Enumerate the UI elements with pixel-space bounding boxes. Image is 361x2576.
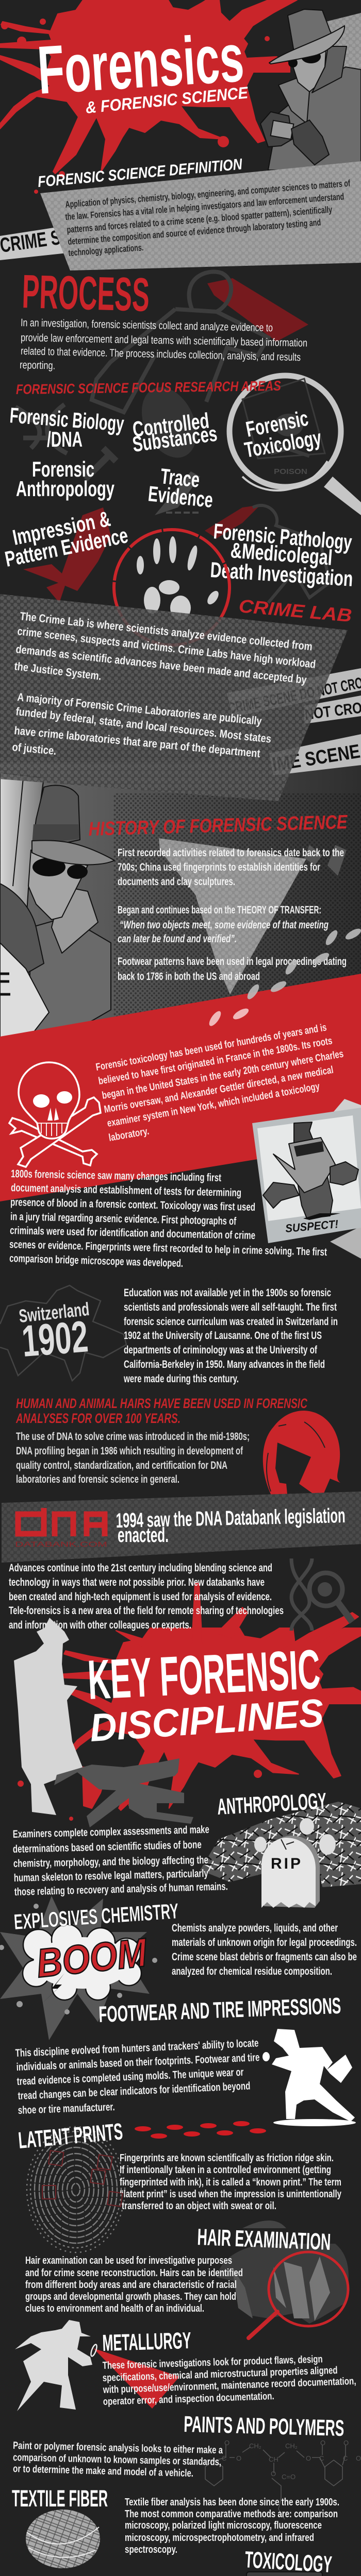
text: hair examination: groups and developmental growth phases. They can hold — [25, 2291, 236, 2302]
background: process ghost images — [15, 272, 330, 603]
panel: history background — [0, 762, 361, 1041]
text: explosives — [172, 1922, 357, 1977]
text: hair examination — [25, 2255, 243, 2314]
text: hair examination: Hair examination can be used for investigative purposes — [25, 2255, 232, 2266]
text: 1800s forensic science: document analysis and establishment of tests for determining — [11, 1182, 241, 1199]
text: paints: comparison of unknown to known samples or standards, — [13, 2452, 221, 2468]
icon: skull and crossbones — [9, 1062, 101, 1167]
icon: handprint in red ring — [114, 530, 229, 645]
text: history of forensic science — [118, 847, 347, 982]
panel: crime lab: A majority of Forensic Crime Laboratories are publically — [17, 690, 262, 727]
icon: hair under magnifier — [217, 2221, 349, 2338]
text: 1800s forensic science: presence of blood in a forensic context. Toxicology was first used — [10, 1196, 255, 1213]
icon: polymer chemical diagram: C — [319, 2454, 324, 2462]
section: hair examination — [25, 2221, 349, 2338]
illustration: detective behind newspaper — [0, 773, 114, 1041]
text: history of forensic science: can later be found and verified”. — [118, 933, 237, 945]
icon: polymer chemical diagram: O — [224, 2439, 229, 2447]
panel: crime lab: funded by federal, state, and local resources. Most states — [15, 705, 272, 745]
icon: polymer chemical diagram: C — [222, 2454, 226, 2462]
label: switzerland 1902: Switzerland — [18, 1298, 90, 1327]
text: anthropology: human skeleton to resolve legal matters, particularly — [14, 1868, 208, 1884]
text: 1800s forensic science — [9, 1168, 327, 1269]
title: key forensic disciplines: DISCIPLINES — [88, 1691, 325, 1750]
text: process description: In an investigation, forensic scientists collect and analyze evidence to — [21, 317, 273, 334]
section: explosives chemistry — [0, 1896, 357, 2040]
text: hair examination: from different body areas and are characteristic of racial — [25, 2279, 237, 2291]
text: paints — [13, 2440, 223, 2479]
icon: footprints — [207, 926, 361, 1028]
text: anthropology: Examiners complete complex assessments and make — [13, 1824, 209, 1840]
icon: polymer chemical diagram: CH₂ — [285, 2442, 298, 2450]
map: switzerland outline — [0, 1285, 126, 1381]
text: education — [123, 1287, 338, 1385]
icon: polymer chemical diagram: O — [236, 2454, 241, 2462]
icon: dna magnifier ghost — [291, 1558, 352, 1631]
panel: dna databank — [2, 1492, 361, 1563]
section: textile fiber — [12, 2485, 339, 2568]
heading: process: PROCESS — [21, 265, 150, 321]
title: Forensics — [36, 20, 246, 108]
text: footwear: tread changes can be clear indicators for identification beyond — [18, 2080, 251, 2102]
section: latent prints — [17, 2118, 342, 2252]
text: toxicology history — [95, 1022, 344, 1144]
silhouette: chalk figure — [54, 1758, 193, 1827]
icon: fingerprint — [27, 2127, 125, 2252]
icon: detective with beam — [15, 2320, 179, 2411]
panel: toxicology red band — [0, 926, 361, 1201]
icon: boom burst — [0, 1896, 157, 2040]
text: hair examination: clues to environment and health of an individual. — [25, 2303, 204, 2314]
icon: bone pile and tombstone — [200, 1802, 361, 1908]
text: paints: or to determine the make and model of a vehicle. — [13, 2463, 193, 2479]
text: footwear: This discipline evolved from hunters and trackers' ability to locate — [15, 2037, 259, 2059]
text: education: were made during this century. — [123, 1373, 239, 1385]
logo: dna databank: DATABANK.COM — [15, 1540, 107, 1548]
heading: latent prints: LATENT PRINTS — [17, 2118, 124, 2154]
text: 1994: enacted. — [118, 1524, 169, 1547]
silhouette: detective standing — [14, 1618, 83, 1815]
icon: polymer chemical diagram: O — [306, 2454, 311, 2462]
logo: dna databank — [15, 1508, 107, 1548]
panel: crime lab — [0, 594, 348, 801]
text: dna: quality control, standardization, and certification for DNA — [16, 1460, 227, 1471]
text: textile fiber — [125, 2497, 339, 2555]
text: 21st century: technology in ways that were not possible prior. New databanks have — [9, 1577, 265, 1588]
title: key forensic disciplines — [86, 1638, 325, 1750]
icon: polymer chemical diagram: O — [271, 2470, 276, 2478]
icon: polymer chemical diagram: CH — [269, 2455, 278, 2463]
text: anthropology: chemistry, morphology, and the biology affecting the — [13, 1854, 208, 1870]
text: 1994 — [116, 1504, 346, 1547]
panel: definition: technology applications. — [68, 242, 144, 258]
icon: polymer chemical diagram: O — [320, 2439, 325, 2447]
panel: crime lab: the Justice System. — [13, 659, 102, 683]
text: history of forensic science: back to 1786 in both the US and abroad — [118, 971, 260, 982]
detective with camera — [260, 9, 361, 170]
list: research areas — [3, 403, 354, 591]
text: 21st century — [9, 1562, 284, 1631]
icon: yarn ball — [26, 2510, 100, 2568]
section: metallurgy — [15, 2320, 356, 2411]
blood splatter — [0, 0, 297, 193]
icon: polymer chemical diagram: CH₂ — [249, 2442, 261, 2450]
list: research areas: Impression & — [10, 506, 112, 550]
text: footwear: tread evidence is completed using molds. The unique wear or — [17, 2066, 244, 2088]
heading: explosives chemistry: EXPLOSIVES CHEMISTRY — [13, 1899, 179, 1934]
list: research areas: /DNA — [47, 427, 83, 451]
text: dna: The use of DNA to solve crime was introduced in the mid-1980s; — [16, 1431, 250, 1443]
icon: red footprints — [135, 2121, 266, 2139]
heading: hairs: ANALYSES FOR OVER 100 YEARS. — [15, 1411, 180, 1426]
heading: crime lab: CRIME LAB — [238, 595, 353, 626]
text: footwear — [15, 2037, 260, 2116]
panel: crime lab: demands as scientific advances have been made and accepted by — [15, 642, 308, 686]
subtitle: & FORENSIC SCIENCE — [85, 83, 250, 117]
text: 1800s forensic science: in a jury trial regarding arsenic evidence. First photographs of — [10, 1211, 237, 1227]
text: paints: Paint or polymer forensic analysis looks to either make a — [13, 2440, 223, 2456]
text: hair examination: and for crime scene reconstruction. Hairs can be identified — [25, 2267, 243, 2279]
text: process description — [20, 317, 307, 372]
heading: hairs — [15, 1396, 307, 1426]
icon: bone pile and tombstone: RIP — [271, 1855, 301, 1872]
section: footwear and tire — [15, 1993, 356, 2139]
heading: definition: FORENSIC SCIENCE DEFINITION — [37, 156, 243, 191]
icon: polymer chemical diagram: O — [356, 2454, 361, 2462]
text: process description: reporting. — [20, 359, 55, 372]
section: anthropology — [13, 1788, 361, 1908]
text: footwear: shoe or tire manufacturer. — [18, 2101, 115, 2116]
text: dna: laboratories and forensic science in general. — [16, 1473, 179, 1485]
text: latent prints: transferred to an object with sweat or oil. — [122, 2200, 276, 2212]
section: paints and polymers — [13, 2412, 361, 2519]
panel: crime lab: have crime laboratories that are part of the department — [14, 724, 261, 760]
text: 1800s forensic science: 1800s forensic science saw many changes including first — [11, 1168, 221, 1184]
text: 1800s forensic science: comparison bridge microscope was developed. — [9, 1252, 183, 1269]
list: research areas: Forensic Biology — [9, 403, 125, 436]
list: research areas: Anthropology — [16, 477, 114, 501]
list: research areas: Substances — [131, 421, 219, 456]
list: research areas: Evidence — [147, 481, 214, 512]
text: toxicology history: laboratory. — [108, 1126, 150, 1144]
background: key disciplines splatter — [18, 1583, 361, 1820]
list: research areas: Controlled — [131, 408, 210, 442]
text: metallurgy: operator error, and inspection documentation. — [103, 2391, 274, 2408]
list: research areas: Trace — [159, 464, 201, 492]
text: metallurgy — [102, 2353, 356, 2408]
text: history of forensic science: documents and clay sculptures. — [118, 876, 235, 888]
illustration: suspect polaroid — [252, 1099, 361, 1259]
panel: hero header — [0, 0, 361, 193]
label: switzerland 1902: 1902 — [20, 1312, 90, 1366]
panel: crime lab: of justice. — [12, 740, 57, 757]
icon: magnifying glass with poison — [229, 376, 361, 515]
list: research areas: Forensic — [244, 406, 310, 442]
list: research areas: Toxicology — [243, 425, 323, 462]
illustration: suspect polaroid: SUSPECT! — [285, 1217, 339, 1235]
icon: woman hair silhouette — [263, 1411, 340, 1499]
icon: boom burst: BOOM — [35, 1929, 150, 1986]
icon: polymer chemical diagram — [205, 2439, 361, 2519]
list: research areas: Forensic — [32, 457, 94, 481]
text: anthropology — [13, 1824, 228, 1898]
text: footwear: individuals or animals based on their footprints. Footwear and tire — [16, 2052, 260, 2073]
text: dna — [16, 1431, 250, 1485]
text: latent prints — [120, 2153, 342, 2212]
text: 21st century: and information with other colleagues or experts. — [9, 1619, 191, 1631]
icon: polymer chemical diagram: O — [343, 2439, 349, 2447]
silhouette: running detective — [262, 2029, 356, 2126]
text: anthropology: determinations based on scientific studies of bone — [13, 1839, 202, 1855]
text: textile fiber: spectroscopy. — [125, 2544, 177, 2555]
heading: focus research areas: FORENSIC SCIENCE FOCUS RESEARCH AREAS — [16, 378, 281, 397]
heading: metallurgy: METALLURGY — [102, 2327, 191, 2356]
heading: textile fiber: TEXTILE FIBER — [12, 2485, 108, 2512]
text: 1800s forensic science: criminals were used for identification and documentation of crime — [10, 1225, 255, 1242]
icon: polymer chemical diagram: C — [343, 2454, 348, 2462]
section: toxicology — [18, 2546, 333, 2576]
icon: polymer chemical diagram: C=O — [282, 2473, 296, 2481]
icon: sample jar — [246, 2572, 322, 2576]
label: switzerland 1902 — [18, 1298, 90, 1366]
text: anthropology: those relating to recovery and analysis of human remains. — [14, 1880, 228, 1898]
panel: definition — [40, 161, 361, 270]
list: research areas: Pattern Evidence — [3, 523, 130, 571]
text: dna: DNA profiling began in 1986 which resulting in development of — [16, 1445, 243, 1457]
crime scene tapes — [227, 668, 361, 776]
icon: magnifying glass with poison: POISON — [274, 467, 307, 476]
crime scene tape: top: CRIME S — [0, 226, 62, 257]
